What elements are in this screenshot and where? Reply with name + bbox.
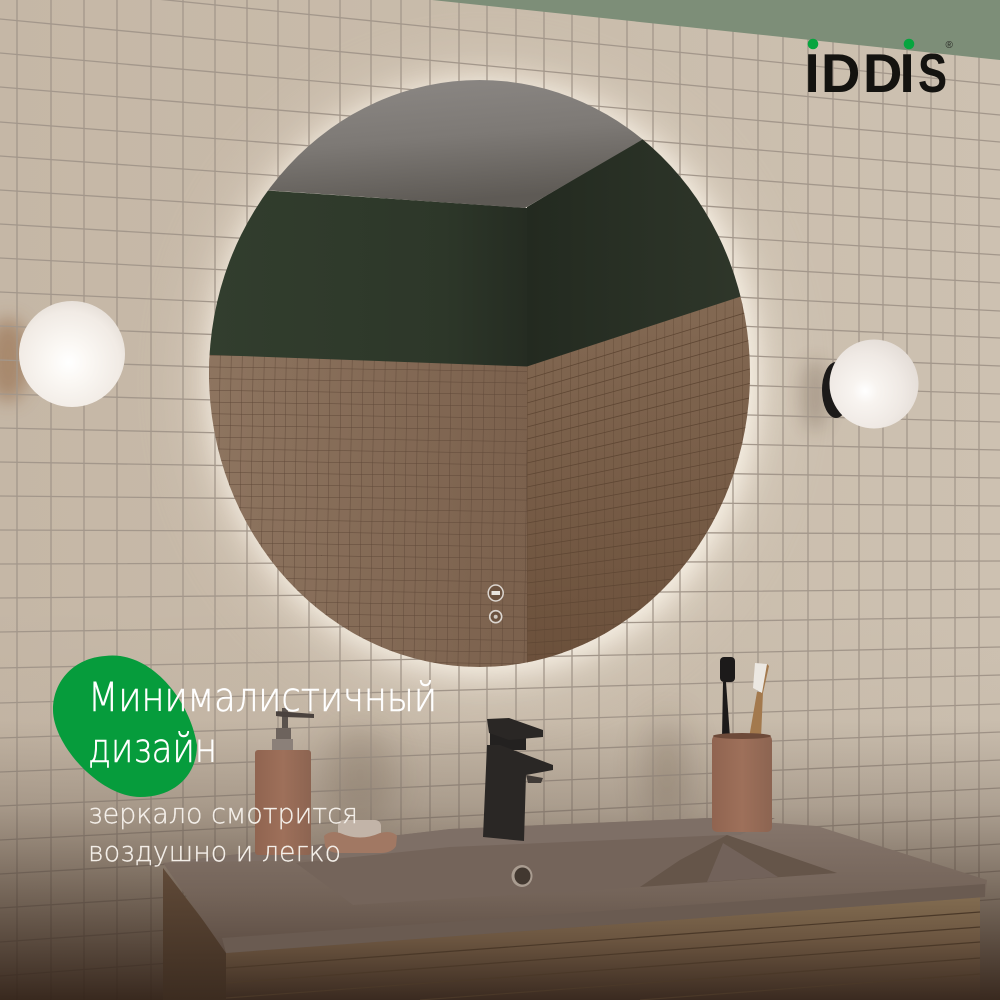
IDDIS logo: IDDI — [804, 43, 915, 104]
IDDIS logo — [804, 39, 954, 104]
mirror reflection: ceiling — [268, 80, 642, 208]
mirror touch button: bottom — [490, 611, 502, 623]
subheading: воздушно и легко — [88, 835, 341, 868]
mirror reflection: right tiled wall — [527, 293, 750, 662]
IDDIS logo: S — [918, 43, 947, 104]
round mirror — [209, 80, 750, 667]
green wall strip at top — [432, 0, 1000, 60]
soft wall shadows — [0, 318, 829, 825]
green blob behind heading — [53, 656, 197, 797]
soap dispenser — [255, 708, 314, 855]
vanity cabinet — [163, 868, 980, 1000]
toothbrush cup — [712, 733, 772, 832]
IDDIS logo: ® — [946, 40, 954, 51]
mirror touch button: top — [488, 585, 503, 601]
toothbrush: black — [720, 657, 735, 737]
mirror reflection: left tiled wall — [200, 350, 528, 680]
wide mirror backlight glow — [194, 68, 774, 696]
left wall lamp — [19, 301, 125, 407]
heading: дизайн — [88, 726, 217, 772]
mirror reflection: green right band — [527, 139, 740, 366]
soap dish with soap — [324, 820, 397, 853]
toothbrush: bamboo — [749, 663, 769, 738]
subheading: зеркало смотрится — [88, 797, 358, 830]
mirror backlight glow — [210, 81, 758, 675]
subheading — [88, 797, 358, 868]
mirror reflection: green left band — [200, 186, 527, 366]
countertop with basin — [163, 818, 987, 953]
black faucet — [483, 718, 553, 841]
bottom shading on the wall — [0, 600, 1000, 1000]
basin drain — [512, 865, 532, 887]
heading: Минималистичный — [88, 675, 437, 721]
heading — [88, 675, 437, 772]
right wall lamp — [822, 340, 918, 428]
